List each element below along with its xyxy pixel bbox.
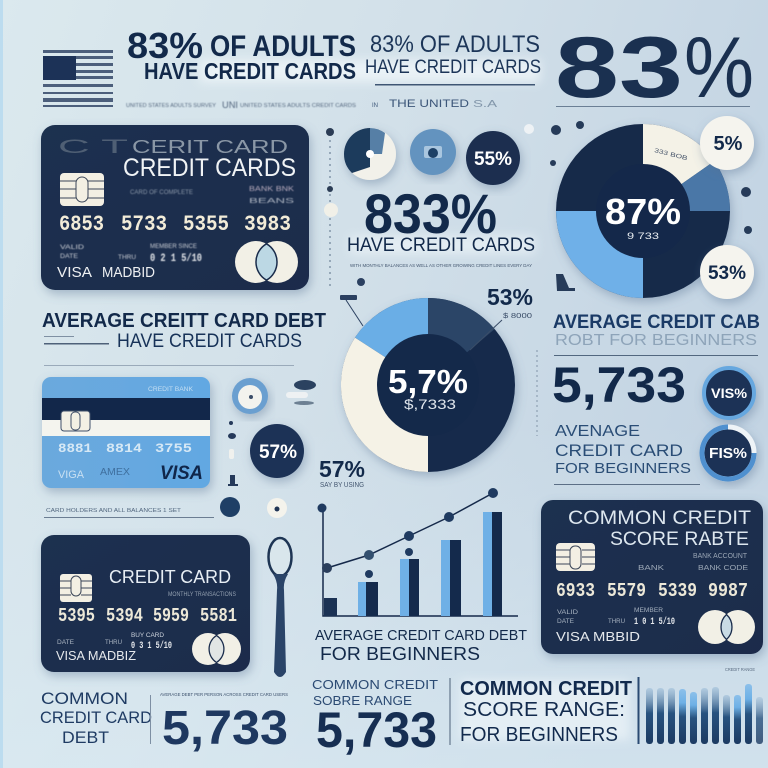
segment: cream bbox=[643, 124, 714, 211]
card heading: CREDIT CARDS bbox=[123, 154, 296, 182]
card number: 5581 bbox=[200, 605, 237, 627]
small icons near top-middle bbox=[340, 278, 365, 326]
card details: BUY CARD bbox=[131, 633, 165, 639]
card details: DATE bbox=[57, 640, 74, 646]
white band bbox=[42, 420, 210, 436]
caption: in the United States bbox=[372, 98, 497, 110]
title: main heading: 83% bbox=[127, 25, 203, 66]
icon: blue circle bbox=[232, 378, 268, 414]
card small print: THRU bbox=[118, 255, 136, 261]
label: 53% with leader: $ 8000 bbox=[503, 313, 532, 320]
badge: VIS% ring: VIS% bbox=[711, 385, 748, 401]
icon: chip bbox=[60, 173, 104, 206]
text: chart caption: AVERAGE CREDIT CARD DEBT bbox=[315, 627, 527, 644]
card brand text: VISA bbox=[57, 264, 92, 281]
icon: card network circles bbox=[235, 241, 298, 283]
card number: 9987 bbox=[708, 580, 748, 602]
stat: 5,733 right: 5,733 bbox=[552, 357, 686, 413]
badge: 55% bbox=[466, 131, 520, 185]
card number bbox=[58, 441, 192, 456]
dots row bbox=[220, 497, 287, 518]
badge: 5% bbox=[700, 116, 754, 170]
subtitle: repeated heading: 83% OF ADULTS bbox=[370, 31, 540, 58]
text: average credit card debt: AVERAGE CREITT CARD DEBT bbox=[42, 310, 326, 332]
text: average credit card for beginners: AVENAGE bbox=[555, 423, 640, 440]
card details: 1 0 1 5/10 bbox=[634, 616, 675, 628]
axes bbox=[323, 508, 518, 616]
card number: 8814 bbox=[106, 441, 142, 456]
icon: card network circles bbox=[698, 610, 755, 644]
label: 57%: 57% bbox=[319, 456, 365, 482]
caption: in the United States: IN bbox=[372, 103, 378, 109]
bars bbox=[324, 512, 502, 616]
text: common credit card debt: DEBT bbox=[62, 728, 109, 747]
card details: DATE bbox=[557, 619, 574, 625]
card details: THRU bbox=[608, 619, 625, 625]
divider text row: CARD HOLDERS AND ALL BALANCES 1 SET bbox=[46, 508, 181, 514]
badge: FIS% ring bbox=[702, 427, 754, 479]
icon: chip bbox=[60, 574, 92, 602]
caption: bottom right tiny: CREDIT RANGE bbox=[725, 667, 755, 672]
icon: small half pie bbox=[344, 128, 396, 180]
card number: 6853 bbox=[59, 212, 104, 237]
card details bbox=[557, 608, 675, 628]
subtitle: repeated heading bbox=[365, 31, 541, 86]
card number: 5395 bbox=[58, 605, 95, 627]
stat: 833% have credit cards: HAVE CREDIT CARDS bbox=[347, 235, 535, 256]
text: common credit score range small: SOBRE RANGE bbox=[313, 693, 412, 708]
card brand: VISA bbox=[160, 463, 203, 484]
card number: 5355 bbox=[183, 212, 229, 237]
badge: FIS% ring: FIS% bbox=[709, 445, 747, 462]
card small print: MEMBER SINCE bbox=[150, 244, 197, 250]
pie centre: 87% bbox=[605, 191, 681, 232]
pie centre: $,7333 bbox=[404, 396, 456, 412]
card number bbox=[59, 212, 291, 237]
card faded brand: AMEX bbox=[100, 467, 130, 478]
text: common credit card debt bbox=[40, 689, 152, 747]
big stat: 83%: % bbox=[684, 20, 754, 116]
card heading: COMMON CREDIT bbox=[568, 508, 751, 529]
divider with caption bbox=[150, 692, 288, 744]
icon: small pictogram bbox=[286, 380, 316, 405]
caption: United States left bbox=[126, 100, 357, 110]
text: average credit cab: AVERAGE CREDIT CAB bbox=[553, 312, 760, 333]
card number: 3983 bbox=[244, 212, 291, 237]
card heading: CERIT CARD bbox=[132, 137, 288, 157]
card number: 5394 bbox=[106, 605, 143, 627]
stat: 5,733 lower left: 5,733 bbox=[162, 702, 288, 755]
badge: 53% bbox=[700, 245, 754, 299]
credit card: lower left bbox=[41, 535, 250, 672]
stat: 833% have credit cards: WITH MONTHLY BALANCES AS WELL AS OTHER GROWING CREDIT LINES EVERY DAY bbox=[350, 263, 532, 268]
card number: 3755 bbox=[155, 441, 192, 456]
credit card: lower right bbox=[541, 500, 763, 654]
title: main heading: HAVE CREDIT CARDS bbox=[144, 58, 356, 84]
icon: chip bbox=[61, 411, 90, 431]
card heading: C T bbox=[58, 137, 129, 158]
card number: 5733 bbox=[121, 212, 167, 237]
divider bbox=[450, 678, 451, 745]
text: common credit score range bbox=[460, 678, 632, 746]
card brand text: MADBID bbox=[102, 264, 155, 281]
card details: THRU bbox=[105, 640, 122, 646]
caption: United States left: UNITED STATES ADULTS SURVEY bbox=[126, 103, 217, 109]
big stat: 83%: 83 bbox=[555, 20, 683, 116]
card top label: CREDIT BANK bbox=[148, 387, 193, 393]
pie centre: 9 733 bbox=[627, 231, 659, 241]
text: average credit card for beginners bbox=[554, 423, 700, 485]
card details: MEMBER bbox=[634, 608, 664, 614]
card small print: 0 2 1 5/10 bbox=[150, 253, 202, 265]
pie centre: 5,7% bbox=[388, 363, 468, 400]
timeline: dotted vertical connector bbox=[324, 128, 338, 290]
card small print: MONTHLY TRANSACTIONS bbox=[168, 592, 236, 598]
card heading: CREDIT CARD bbox=[109, 567, 231, 587]
text: average credit card for beginners: CREDIT CARD bbox=[555, 441, 683, 460]
text: common credit score range: COMMON CREDIT bbox=[460, 678, 632, 700]
badge: 57%: 57% bbox=[259, 442, 297, 463]
segment: light blue bbox=[556, 211, 643, 298]
card small print: DATE bbox=[60, 254, 78, 260]
credit card: light blue bbox=[42, 377, 210, 488]
badge: 5%: 5% bbox=[714, 133, 743, 155]
caption: in the United States: THE UNITED bbox=[389, 98, 469, 110]
label: 53% with leader bbox=[470, 284, 533, 350]
text: average credit card for beginners: FOR BEGINNERS bbox=[555, 460, 691, 477]
icon: blue circle bbox=[410, 129, 456, 175]
caption: in the United States: S.A bbox=[473, 99, 497, 110]
pie chart: centre bbox=[341, 298, 515, 472]
segment: light blue bbox=[355, 298, 428, 385]
text: average credit card debt: HAVE CREDIT CARDS bbox=[117, 331, 302, 352]
stat: 833% have credit cards bbox=[347, 182, 535, 268]
pie chart: right bbox=[556, 124, 730, 298]
caption: United States left: UNITED STATES ADULTS CREDIT CARDS bbox=[240, 103, 357, 109]
card small print: CARD OF COMPLETE bbox=[130, 190, 193, 196]
mini bar chart: bottom right bbox=[638, 677, 763, 744]
text: common credit score range small bbox=[312, 677, 438, 708]
card small print: BANK bbox=[638, 565, 664, 572]
card small print bbox=[638, 553, 748, 572]
credit card: top left bbox=[41, 125, 309, 290]
text: common credit score range: FOR BEGINNERS bbox=[460, 724, 618, 746]
card number: 8881 bbox=[58, 441, 92, 456]
card details: 0 3 1 5/10 bbox=[131, 640, 172, 652]
card small print: VALID bbox=[60, 245, 85, 251]
badge: 53%: 53% bbox=[708, 263, 746, 284]
small icons around right pie bbox=[550, 121, 752, 291]
card small print bbox=[60, 186, 295, 265]
card small print: BANK ACCOUNT bbox=[693, 553, 748, 560]
label: 53% with leader: 53% bbox=[487, 284, 533, 310]
pie centre bbox=[377, 334, 479, 436]
card faded brand bbox=[58, 467, 130, 481]
icon: US flag bbox=[43, 50, 113, 107]
card heading bbox=[568, 508, 751, 550]
segment: cream bbox=[341, 338, 428, 472]
big stat: 83% bbox=[555, 20, 754, 116]
text: common credit card debt: COMMON bbox=[41, 689, 128, 708]
vertical dotted divider bbox=[536, 350, 538, 436]
text: average credit cab bbox=[553, 312, 760, 356]
card small print: BANK CODE bbox=[698, 565, 748, 572]
card number bbox=[556, 580, 748, 602]
card number bbox=[58, 605, 237, 627]
icon: card network circles bbox=[192, 633, 241, 665]
stat: 833% have credit cards: 833% bbox=[364, 182, 497, 245]
icon: spoon bbox=[268, 538, 292, 677]
segment: steel blue bbox=[643, 161, 730, 211]
card brand text: VISA MBBID bbox=[556, 629, 640, 644]
icon: chip bbox=[556, 543, 595, 571]
trend line bbox=[318, 488, 498, 578]
segment: dark steel bbox=[428, 298, 495, 385]
magnetic stripe bbox=[42, 398, 210, 420]
text: chart caption: FOR BEGINNERS bbox=[320, 644, 480, 664]
card faded brand: VIGA bbox=[58, 469, 85, 481]
text: common credit card debt: CREDIT CARD bbox=[40, 708, 152, 727]
text: average credit cab: ROBT FOR BEGINNERS bbox=[555, 332, 757, 349]
card number: 5339 bbox=[658, 580, 697, 602]
card heading: SCORE RABTE bbox=[610, 529, 749, 550]
segment label: 333 BOB bbox=[654, 148, 688, 162]
stat: 5,733 centre: 5,733 bbox=[316, 702, 437, 758]
card details bbox=[57, 633, 172, 652]
card number: 5959 bbox=[153, 605, 189, 627]
text: average credit card debt bbox=[42, 310, 326, 366]
text: common credit score range small: COMMON CREDIT bbox=[312, 677, 438, 692]
small dot bbox=[524, 124, 534, 134]
card small print: BANK BNK bbox=[249, 186, 294, 193]
card brand text bbox=[57, 264, 155, 281]
caption: United States left: UNI bbox=[222, 100, 238, 110]
card number: 6933 bbox=[556, 580, 595, 602]
badge: VIS% ring bbox=[704, 368, 754, 418]
small icons column bbox=[228, 421, 238, 486]
text: common credit score range: SCORE RANGE: bbox=[463, 699, 625, 721]
card number: 5579 bbox=[607, 580, 646, 602]
badge: 57% bbox=[250, 424, 304, 478]
subtitle: repeated heading: HAVE CREDIT CARDS bbox=[365, 56, 541, 78]
text: chart caption bbox=[315, 627, 527, 664]
title: main heading: OF ADULTS bbox=[210, 30, 356, 63]
card heading bbox=[58, 137, 296, 182]
badge: 55%: 55% bbox=[474, 149, 512, 170]
card small print: BEANS bbox=[249, 198, 295, 205]
pie centre bbox=[596, 164, 690, 258]
bar chart bbox=[318, 488, 518, 616]
card details: VALID bbox=[557, 610, 579, 616]
label: 57%: SAY BY USING bbox=[320, 482, 364, 489]
title: main heading bbox=[127, 25, 356, 84]
divider with caption: AVERAGE DEBT PER PERSON ACROSS CREDIT CARD USERS bbox=[160, 692, 288, 697]
card brand text: VISA MADBIZ bbox=[56, 649, 136, 663]
